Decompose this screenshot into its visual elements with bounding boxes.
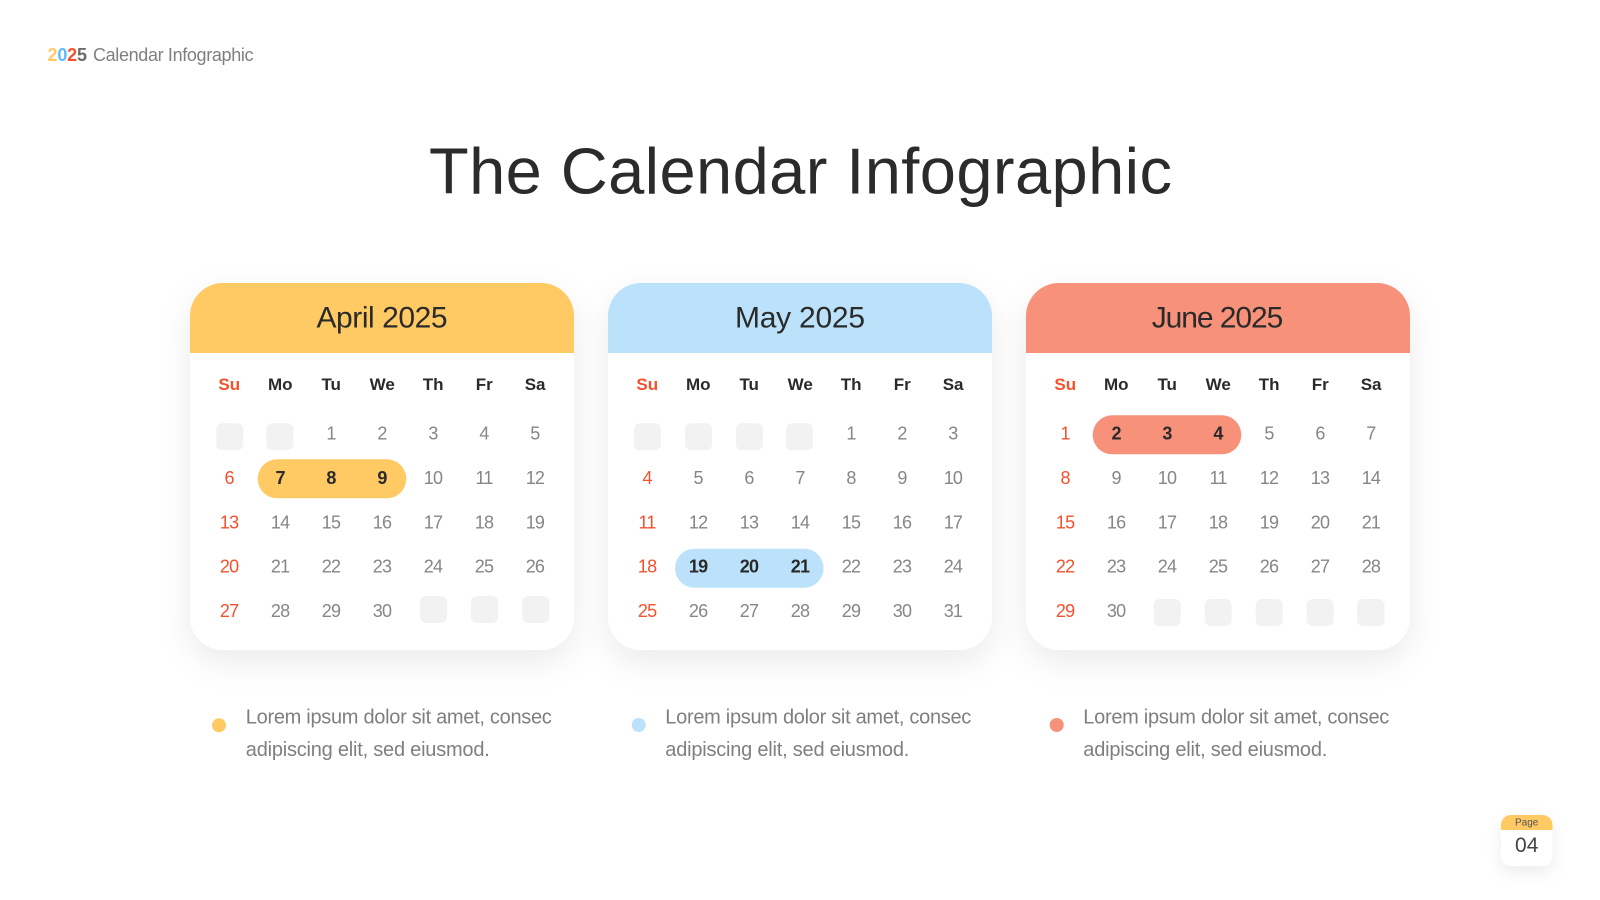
day numbers: 30: [373, 601, 392, 621]
day numbers: 21: [1362, 512, 1381, 532]
month header: [190, 283, 574, 353]
day numbers: 17: [424, 512, 443, 532]
day numbers: 27: [220, 601, 239, 621]
day numbers: 9: [897, 468, 907, 488]
day numbers: 17: [944, 512, 963, 532]
note: June: [1050, 706, 1389, 761]
weekday row: [636, 375, 964, 394]
highlight pill: 2-4: [1093, 415, 1241, 454]
highlight pill: 19-21: [675, 549, 824, 588]
month header: [608, 283, 992, 353]
day numbers: 10: [424, 468, 443, 488]
day numbers: 15: [322, 512, 341, 532]
weekday row: Sa: [525, 375, 546, 394]
day numbers: 12: [1260, 468, 1279, 488]
day numbers: 6: [224, 468, 234, 488]
day numbers: 13: [220, 512, 239, 532]
day numbers: 8: [326, 468, 336, 488]
note text: Lorem ipsum dolor sit amet, consec: [246, 706, 552, 728]
weekday row: Tu: [1157, 375, 1177, 394]
day numbers: 7: [1366, 423, 1376, 443]
day numbers: 30: [893, 601, 912, 621]
day numbers: 16: [1107, 512, 1126, 532]
weekday row: Th: [423, 375, 444, 394]
day numbers: 11: [1209, 468, 1227, 488]
day numbers: 1: [1060, 423, 1070, 443]
month header: April 2025: [316, 302, 448, 334]
day numbers: 17: [1158, 512, 1177, 532]
weekday row: Mo: [268, 375, 293, 394]
weekday row: Su: [1054, 375, 1076, 394]
weekday row: Mo: [1104, 375, 1129, 394]
note text: Lorem ipsum dolor sit amet, consec: [665, 706, 971, 728]
note: May: [632, 706, 971, 761]
note: April: [212, 706, 552, 761]
day numbers: 16: [373, 512, 392, 532]
day numbers: [1056, 423, 1381, 621]
empty day cells: [216, 423, 549, 623]
day numbers: 29: [842, 601, 861, 621]
weekday row: Fr: [1312, 375, 1329, 394]
bullet dot: [632, 718, 646, 732]
month header: May 2025: [735, 302, 865, 334]
day numbers: 6: [744, 468, 754, 488]
day numbers: 12: [689, 512, 708, 532]
weekday row: [218, 375, 546, 394]
day numbers: 22: [842, 557, 861, 577]
day numbers: 2: [377, 423, 387, 443]
day numbers: 26: [689, 601, 708, 621]
day numbers: 20: [740, 557, 759, 577]
bullet dot: [212, 718, 226, 732]
day numbers: 26: [526, 557, 545, 577]
weekday row: We: [370, 375, 395, 394]
weekday row: Sa: [943, 375, 964, 394]
weekday row: Fr: [894, 375, 911, 394]
day numbers: 13: [1311, 468, 1330, 488]
note text: adipiscing elit, sed eiusmod.: [246, 739, 490, 761]
day numbers: 18: [638, 557, 657, 577]
day numbers: 22: [322, 557, 341, 577]
page badge: Page: [1515, 817, 1539, 828]
card background: [608, 283, 992, 650]
day numbers: 23: [373, 557, 392, 577]
weekday row: Tu: [321, 375, 341, 394]
panel: May 2025: [608, 283, 992, 650]
day numbers: 14: [271, 512, 290, 532]
day numbers: 31: [944, 601, 963, 621]
note text: adipiscing elit, sed eiusmod.: [1083, 739, 1327, 761]
day numbers: 24: [944, 557, 963, 577]
day numbers: 28: [791, 601, 810, 621]
day numbers: 9: [377, 468, 387, 488]
panel: April 2025: [190, 283, 574, 650]
day numbers: 23: [893, 557, 912, 577]
day numbers: 21: [271, 557, 290, 577]
day numbers: 14: [1362, 468, 1381, 488]
day numbers: 20: [1311, 512, 1330, 532]
weekday row: Tu: [739, 375, 759, 394]
day numbers: 29: [1056, 601, 1075, 621]
day numbers: 16: [893, 512, 912, 532]
day numbers: 10: [944, 468, 963, 488]
day numbers: 18: [475, 512, 494, 532]
note text: Lorem ipsum dolor sit amet, consec: [1083, 706, 1389, 728]
weekday row: We: [788, 375, 813, 394]
day numbers: 29: [322, 601, 341, 621]
note text: [665, 706, 971, 761]
note text: [246, 706, 552, 761]
card background: [1026, 283, 1410, 650]
day numbers: 3: [428, 423, 438, 443]
day numbers: 8: [1060, 468, 1070, 488]
day numbers: 25: [475, 557, 494, 577]
weekday row: Su: [218, 375, 240, 394]
day numbers: 18: [1209, 512, 1228, 532]
day numbers: 6: [1315, 423, 1325, 443]
day numbers: 8: [846, 468, 856, 488]
day numbers: 15: [842, 512, 861, 532]
day numbers: 5: [693, 468, 703, 488]
note text: adipiscing elit, sed eiusmod.: [665, 739, 909, 761]
day numbers: 19: [526, 512, 545, 532]
day numbers: 3: [948, 423, 958, 443]
day numbers: 13: [740, 512, 759, 532]
weekday row: Sa: [1361, 375, 1382, 394]
day numbers: 1: [846, 423, 856, 443]
page badge: 04: [1515, 834, 1539, 857]
empty day cells: [634, 423, 813, 450]
day numbers: 19: [1260, 512, 1279, 532]
day numbers: 14: [791, 512, 810, 532]
day numbers: [220, 423, 545, 621]
title: The Calendar Infographic: [429, 134, 1172, 208]
day numbers: 7: [275, 468, 285, 488]
weekday row: Th: [841, 375, 862, 394]
day numbers: 25: [1209, 557, 1228, 577]
day numbers: 12: [526, 468, 545, 488]
month header: [1026, 283, 1410, 353]
day numbers: 22: [1056, 557, 1075, 577]
highlight pill: 7-9: [258, 459, 406, 498]
day numbers: 23: [1107, 557, 1126, 577]
day numbers: 5: [530, 423, 540, 443]
day numbers: 11: [639, 512, 656, 532]
day numbers: 24: [1158, 557, 1177, 577]
day numbers: 2: [1111, 423, 1121, 443]
day numbers: 27: [740, 601, 759, 621]
card background: [190, 283, 574, 650]
weekday row: Fr: [476, 375, 493, 394]
day numbers: 28: [271, 601, 290, 621]
day numbers: 2: [897, 423, 907, 443]
day numbers: [638, 423, 963, 621]
day numbers: 7: [795, 468, 805, 488]
weekday row: Th: [1259, 375, 1280, 394]
weekday row: [1054, 375, 1382, 394]
day numbers: 26: [1260, 557, 1279, 577]
weekday row: Su: [636, 375, 658, 394]
day numbers: 30: [1107, 601, 1126, 621]
day numbers: 5: [1264, 423, 1274, 443]
day numbers: 1: [326, 423, 336, 443]
day numbers: 28: [1362, 557, 1381, 577]
day numbers: 4: [1213, 423, 1223, 443]
day numbers: 21: [791, 557, 810, 577]
bullet dot: [1050, 718, 1064, 732]
weekday row: We: [1206, 375, 1231, 394]
day numbers: 24: [424, 557, 443, 577]
empty day cells: [1154, 599, 1384, 626]
day numbers: 9: [1111, 468, 1121, 488]
day numbers: 4: [479, 423, 489, 443]
day numbers: 27: [1311, 557, 1330, 577]
month header: June 2025: [1152, 302, 1283, 334]
day numbers: 3: [1162, 423, 1172, 443]
day numbers: 11: [475, 468, 493, 488]
day numbers: 15: [1056, 512, 1075, 532]
top label: Calendar Infographic: [93, 45, 254, 65]
note text: [1083, 706, 1389, 761]
day numbers: 25: [638, 601, 657, 621]
page badge: [1501, 815, 1552, 866]
day numbers: 19: [689, 557, 708, 577]
day numbers: 10: [1158, 468, 1177, 488]
weekday row: Mo: [686, 375, 711, 394]
day numbers: 4: [642, 468, 652, 488]
day numbers: 20: [220, 557, 239, 577]
top label: 2025: [48, 45, 87, 65]
panel: June 2025: [1026, 283, 1410, 650]
